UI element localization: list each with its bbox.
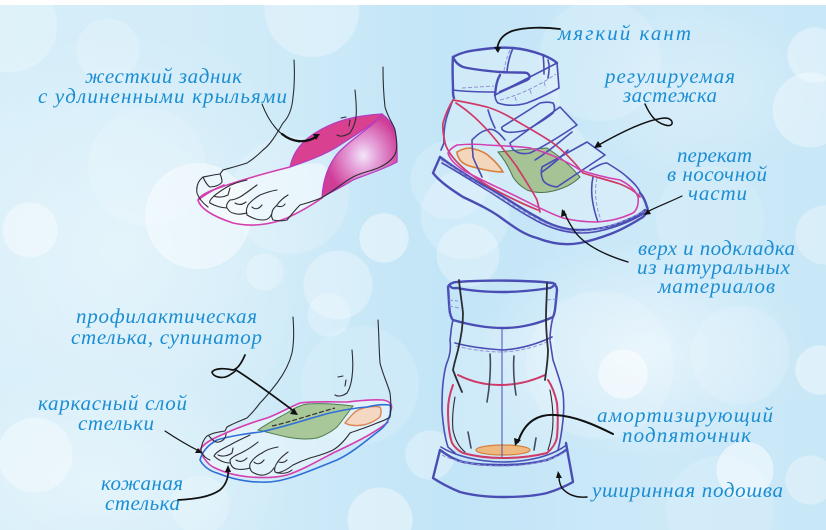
arrow: toe rocker xyxy=(644,196,682,215)
label: frame layer: стельки xyxy=(78,411,154,435)
label: wide sole: уширинная подошва xyxy=(590,478,783,502)
straps xyxy=(495,63,559,105)
orange heel pad xyxy=(457,148,503,172)
foot lines xyxy=(223,60,294,170)
sole xyxy=(433,157,648,244)
illustration: shoe side view xyxy=(433,48,648,244)
arrow: heel counter xyxy=(262,104,320,142)
label: soft edge: мягкий кант xyxy=(557,21,691,45)
arrow: frame layer xyxy=(165,431,202,453)
black lines xyxy=(453,280,463,392)
label: rigid counter: с удлиненными крыльями xyxy=(38,84,287,108)
toes xyxy=(201,427,292,475)
label: adjustable fastener xyxy=(603,64,735,107)
body sides xyxy=(442,320,455,453)
label: frame layer: каркасный слой xyxy=(38,391,188,415)
label: natural materials: материалов xyxy=(657,274,775,298)
arrow: soft edge xyxy=(494,28,560,53)
collar xyxy=(453,48,557,63)
green arch support xyxy=(498,148,580,192)
toe cap xyxy=(590,163,640,222)
label: prophylactic insole: профилактическая xyxy=(76,304,257,328)
label: rigid counter xyxy=(38,64,287,108)
label: leather insole: кожаная xyxy=(101,471,183,495)
illustration: shoe rear view xyxy=(433,280,573,497)
label: cushioning heel pad: подпяточник xyxy=(622,423,751,447)
foot lines xyxy=(227,317,294,427)
arrow: heel cushion xyxy=(514,415,613,446)
red seam lines xyxy=(443,100,640,212)
toes xyxy=(197,170,288,221)
label: toe rocker: части xyxy=(688,181,747,205)
label: frame layer xyxy=(38,391,188,435)
label: natural materials: верх и подкладка xyxy=(638,236,795,260)
arrow: wide sole xyxy=(556,471,587,497)
label: cushioning heel pad: амортизирующий xyxy=(597,403,774,427)
collar xyxy=(448,281,557,328)
green supinator xyxy=(258,404,353,439)
blue insole xyxy=(200,405,391,482)
label: toe rocker xyxy=(667,143,768,205)
label: natural materials: из натуральных xyxy=(637,255,791,279)
label: leather insole xyxy=(101,471,183,515)
arrow: natural materials xyxy=(561,209,628,262)
arrow: leather insole xyxy=(178,465,231,500)
arrow: adjustable strap xyxy=(594,104,672,148)
illustration: foot with insole xyxy=(200,317,392,482)
label: toe rocker: перекат xyxy=(677,143,752,167)
label: natural materials xyxy=(637,236,795,298)
orange heel pad xyxy=(345,407,381,426)
arrow: insole prophylactic xyxy=(212,355,298,415)
sole xyxy=(433,443,573,497)
label: cushioning heel pad xyxy=(597,403,774,447)
label: leather insole: стелька xyxy=(105,491,180,515)
heel counter back xyxy=(322,114,397,197)
label: toe rocker: в носочной xyxy=(667,162,768,186)
illustration: foot with heel counter xyxy=(197,60,397,225)
insole outline xyxy=(198,167,322,225)
pink insole line xyxy=(448,144,638,222)
heel counter wing xyxy=(290,114,382,167)
red lines xyxy=(458,375,545,385)
label: prophylactic insole xyxy=(71,304,262,349)
label: adjustable fastener: застежка xyxy=(622,83,717,107)
orange heel pad xyxy=(476,445,530,455)
label: prophylactic insole: стелька, супинатор xyxy=(71,325,262,349)
pink insole xyxy=(200,400,392,478)
label: rigid counter: жесткий задник xyxy=(85,64,242,88)
label: adjustable fastener: регулируемая xyxy=(603,64,735,88)
